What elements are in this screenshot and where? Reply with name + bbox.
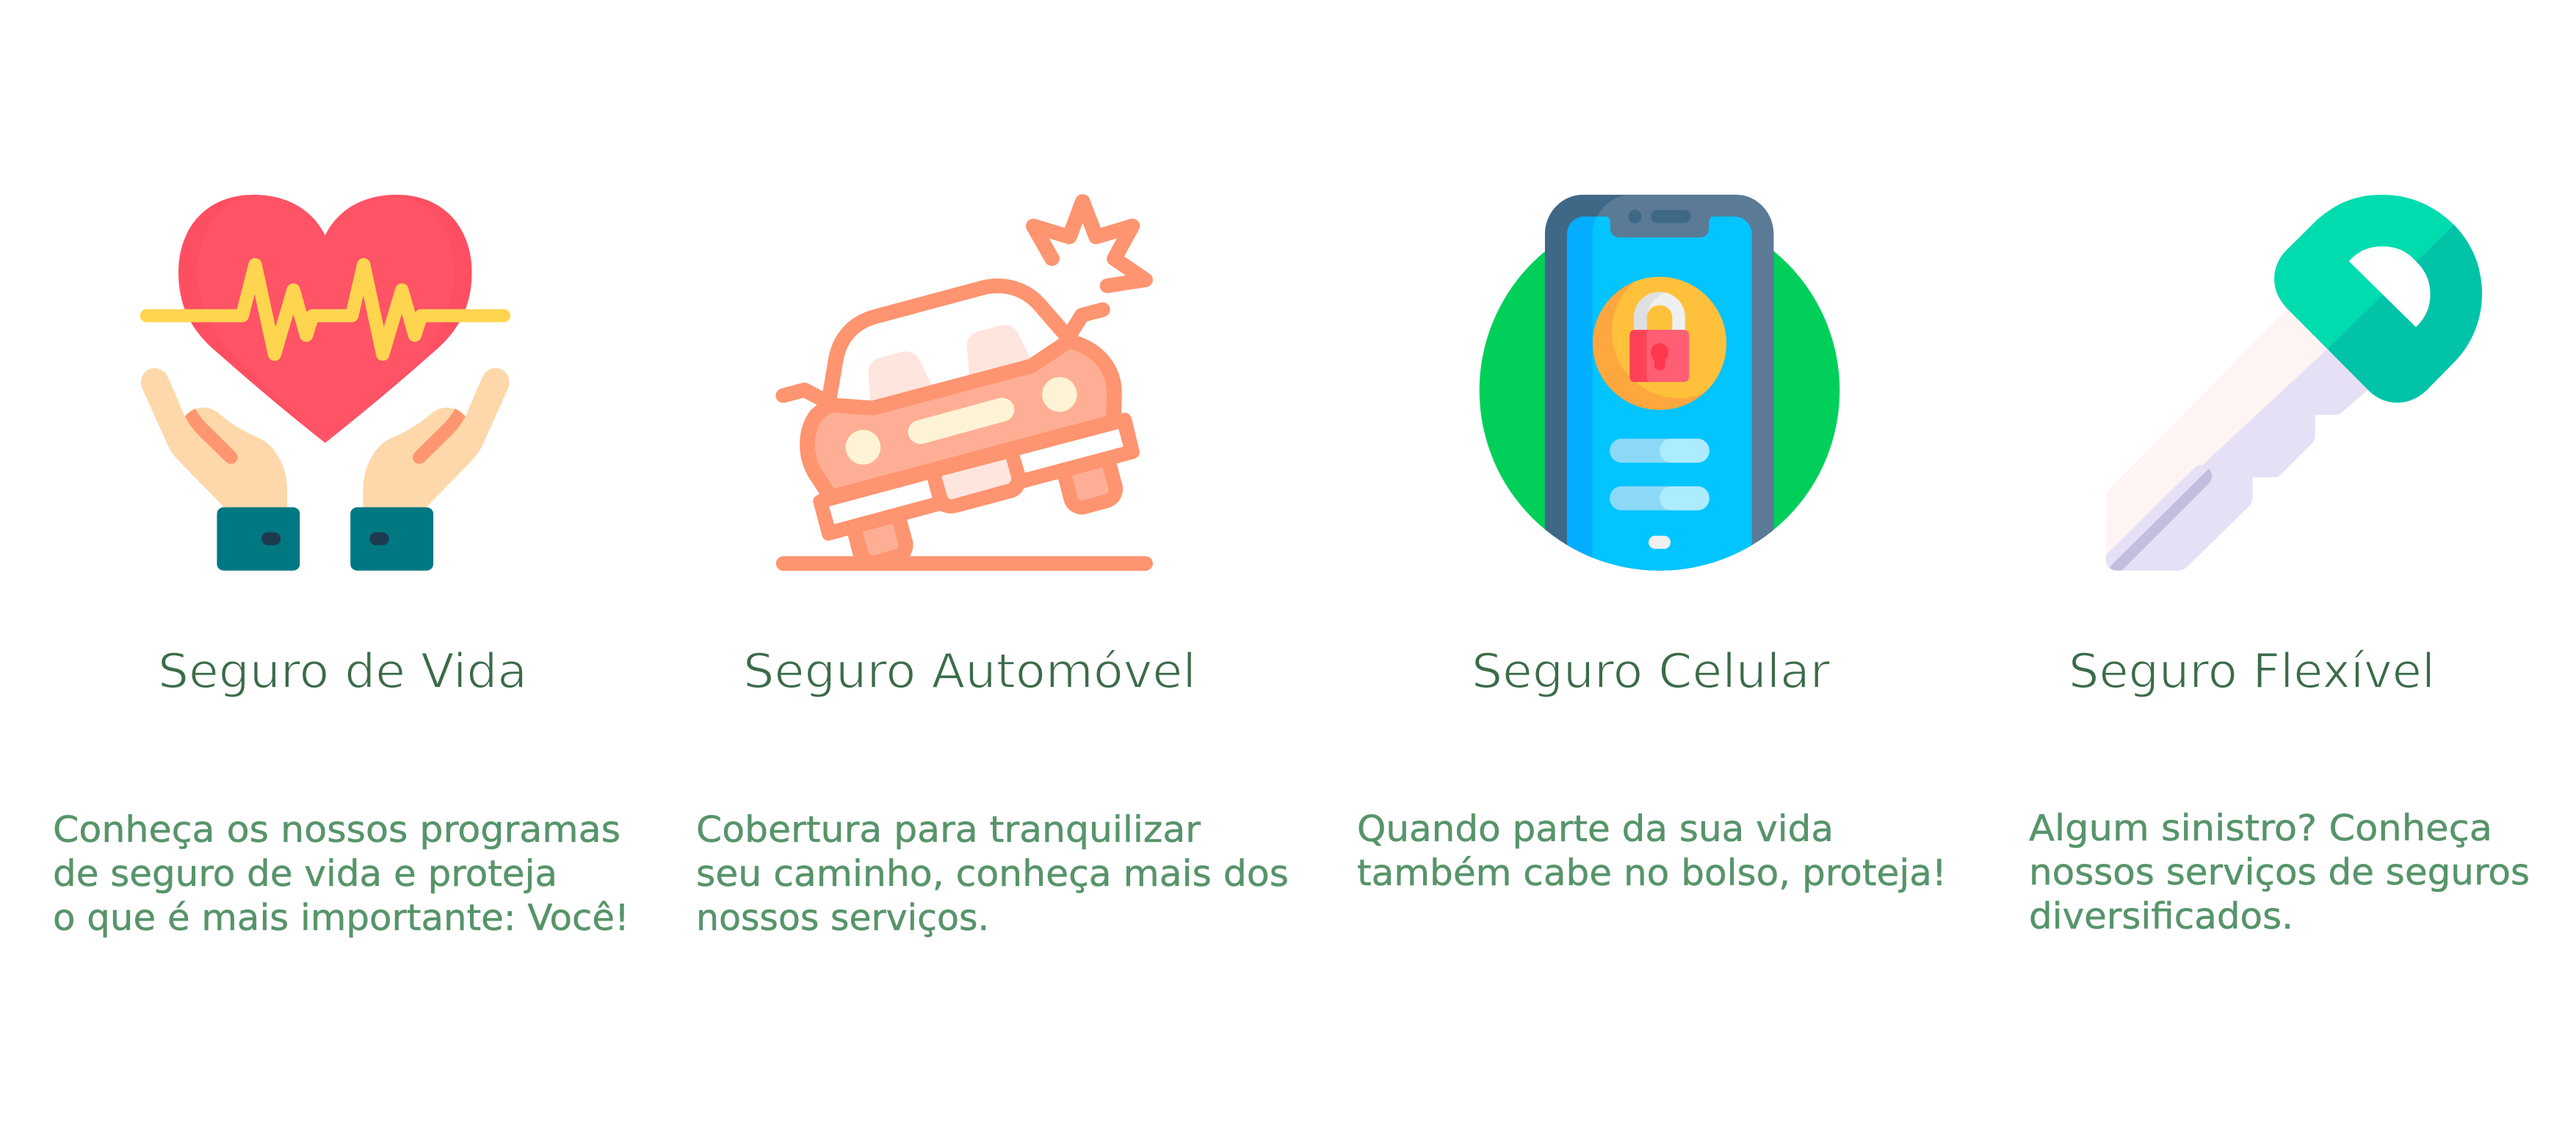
cabin roof [828, 286, 1068, 403]
text: Seguro Celular description: também cabe no bolso, proteja! [1357, 852, 1947, 894]
left hand [141, 368, 300, 571]
text: Seguro Automóvel description: seu caminho, conheça mais dos [696, 853, 1289, 895]
text: Seguro Celular description: Quando parte da sua vida [1357, 808, 1834, 850]
text: Seguro Automóvel description [696, 809, 1289, 939]
green circle [1480, 210, 1839, 571]
heading: Seguro Flexível: Seguro Flexível [2069, 644, 2435, 699]
text: Seguro de Vida description: de seguro de vida e proteja [53, 853, 557, 895]
padlock badge [1592, 276, 1727, 410]
right hand [350, 368, 510, 571]
ground line [784, 544, 1146, 583]
panel: Seguro Flexível [2029, 195, 2530, 937]
heading: Seguro Automóvel: Seguro Automóvel [743, 644, 1196, 699]
key head [2274, 195, 2482, 403]
seats [869, 325, 1032, 403]
phone [1545, 195, 1773, 577]
icon: phone with padlock [1480, 195, 1839, 577]
icon: heart held by hands [141, 195, 510, 571]
text: Seguro Flexível description [2029, 807, 2530, 937]
input bars [1610, 439, 1710, 511]
headlights and grille [846, 377, 1077, 464]
impact star [1033, 201, 1146, 286]
heading: Seguro de Vida: Seguro de Vida [158, 644, 527, 699]
side mirrors [784, 310, 1102, 403]
text: Seguro Automóvel description: Cobertura para tranquilizar [696, 809, 1201, 851]
text: Seguro Automóvel description: nossos serviços. [696, 897, 989, 939]
text: Seguro de Vida description: Conheça os nossos programas [53, 809, 621, 851]
text: Seguro de Vida description [53, 809, 629, 939]
text: Seguro Flexível description: diversificados. [2029, 895, 2293, 937]
wheels [847, 457, 1123, 558]
heading: Seguro Celular: Seguro Celular [1472, 644, 1830, 699]
icon: crashed car [784, 201, 1146, 563]
text: Seguro Flexível description: Algum sinistro? Conheça [2029, 807, 2492, 849]
text: Seguro de Vida description: o que é mais importante: Você! [53, 897, 629, 939]
text: Seguro Flexível description: nossos serviços de seguros [2029, 851, 2530, 893]
bumper [813, 413, 1140, 541]
text: Seguro Celular description [1357, 808, 1947, 894]
pulse line [147, 264, 504, 354]
home button [1649, 536, 1671, 549]
key blade [2106, 308, 2369, 571]
car body [807, 341, 1115, 497]
panel: Seguro Celular [1357, 195, 1947, 894]
heart [178, 195, 472, 443]
icon: key [2106, 195, 2482, 571]
panel: Seguro Automóvel [696, 201, 1289, 939]
panel: Seguro de Vida [53, 195, 629, 939]
